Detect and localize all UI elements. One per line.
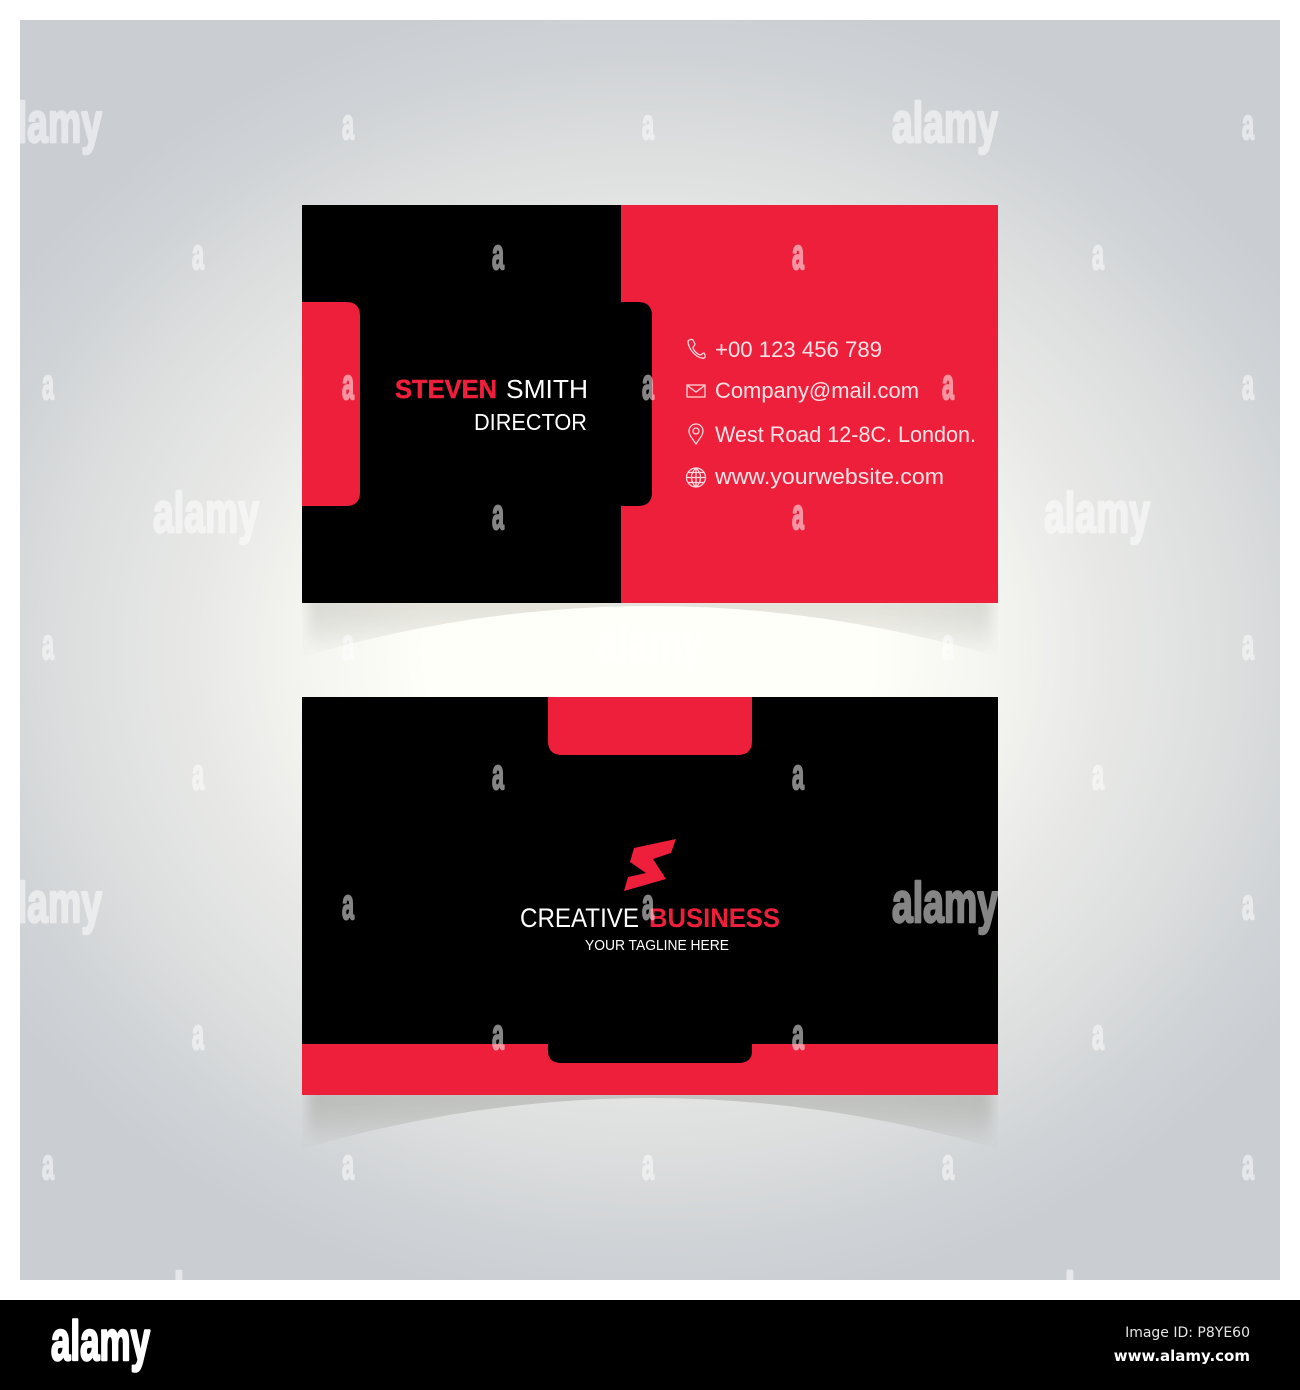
- watermarks: a: [492, 230, 504, 279]
- watermarks: a: [492, 1010, 504, 1059]
- watermarks: a: [942, 360, 954, 409]
- watermarks: a: [1092, 1010, 1104, 1059]
- watermarks: a: [342, 1140, 354, 1189]
- red tab: [302, 302, 360, 506]
- watermarks: a: [642, 360, 654, 409]
- watermarks: alamy: [892, 871, 998, 935]
- logo S: [624, 839, 676, 891]
- watermarks: alamy: [1044, 1261, 1150, 1325]
- top red tab: [548, 697, 752, 755]
- watermarks: a: [192, 750, 204, 799]
- phone number: +00 123 456 789: [715, 337, 882, 362]
- icon: envelope: [687, 385, 705, 397]
- watermarks: alamy: [153, 481, 259, 545]
- image id: Image ID: P8YE60: [1125, 1325, 1250, 1341]
- watermarks: a: [492, 490, 504, 539]
- watermarks: a: [192, 230, 204, 279]
- watermarks: a: [1242, 100, 1254, 149]
- watermarks: a: [642, 100, 654, 149]
- watermarks: a: [1242, 360, 1254, 409]
- watermarks: a: [792, 230, 804, 279]
- icon: location pin: [689, 424, 703, 444]
- watermarks: alamy: [0, 91, 102, 155]
- watermarks: a: [1242, 880, 1254, 929]
- watermarks: a: [492, 750, 504, 799]
- watermarks: a: [192, 1010, 204, 1059]
- front card: [302, 205, 998, 603]
- icon: globe: [686, 468, 706, 487]
- watermarks: a: [42, 360, 54, 409]
- name: STEVEN: [395, 374, 497, 404]
- watermarks: a: [1242, 620, 1254, 669]
- watermarks: a: [342, 620, 354, 669]
- watermarks: a: [342, 360, 354, 409]
- name: SMITH: [506, 374, 588, 404]
- watermarks: alamy: [892, 91, 998, 155]
- watermarks: a: [42, 620, 54, 669]
- bottom red band: [302, 1044, 998, 1095]
- email: Company@mail.com: [715, 378, 919, 403]
- watermarks: a: [642, 880, 654, 929]
- front card black side: [302, 205, 622, 603]
- front card red side: [621, 205, 998, 603]
- back card: [302, 697, 998, 1095]
- company name: BUSINESS: [649, 903, 780, 933]
- shadow under front card: [306, 603, 994, 645]
- shadow under back card: [304, 1095, 996, 1138]
- watermarks: a: [42, 1140, 54, 1189]
- job title: DIRECTOR: [474, 409, 587, 435]
- website: www.yourwebsite.com: [714, 464, 944, 489]
- watermarks: alamy: [1044, 481, 1150, 545]
- watermarks: a: [942, 1140, 954, 1189]
- watermarks: alamy: [0, 871, 102, 935]
- footer background: [0, 1300, 1300, 1390]
- tagline: YOUR TAGLINE HERE: [585, 937, 729, 954]
- watermarks: a: [1242, 1140, 1254, 1189]
- watermarks: a: [942, 620, 954, 669]
- contact details: [686, 337, 976, 489]
- watermarks: a: [342, 880, 354, 929]
- watermarks: a: [1092, 230, 1104, 279]
- back card black base: [302, 697, 998, 1095]
- watermarks: alamy: [153, 1261, 259, 1325]
- address: West Road 12-8C. London.: [715, 422, 976, 447]
- footer logo: alamy: [51, 1309, 150, 1372]
- watermarks: a: [1092, 750, 1104, 799]
- watermarks: a: [642, 1140, 654, 1189]
- watermarks: a: [792, 490, 804, 539]
- bottom black tab: [548, 1043, 752, 1063]
- watermarks: alamy: [597, 611, 703, 675]
- footer url: www.alamy.com: [1114, 1347, 1250, 1365]
- watermarks: a: [342, 100, 354, 149]
- company name: CREATIVE: [520, 903, 639, 933]
- black tab: [621, 302, 652, 506]
- watermarks: a: [792, 750, 804, 799]
- watermarks: a: [792, 1010, 804, 1059]
- footer bar: [0, 1300, 1300, 1390]
- icon: phone: [688, 339, 705, 358]
